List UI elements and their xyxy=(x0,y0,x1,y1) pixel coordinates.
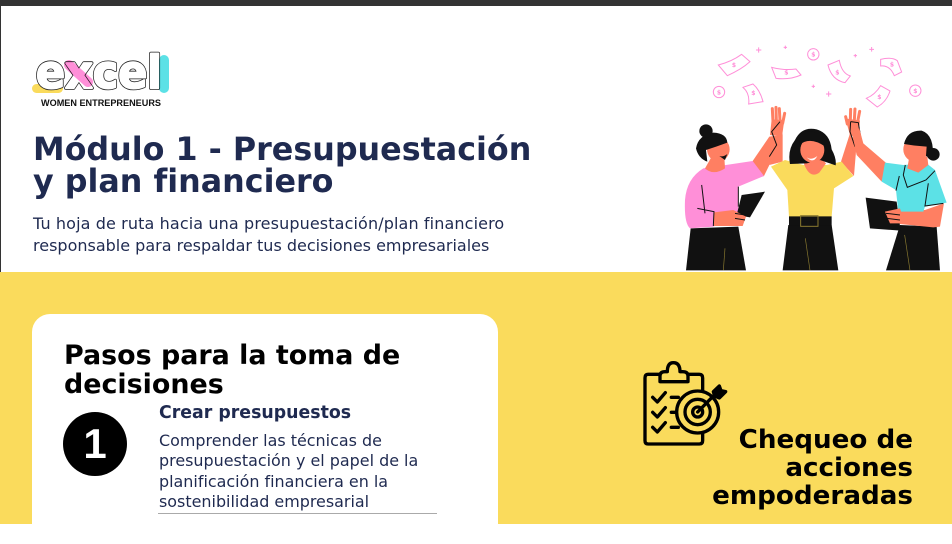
illustration: three women high-fiving xyxy=(685,107,947,270)
woman right xyxy=(852,128,947,270)
heading: steps: decisiones xyxy=(64,368,224,400)
title: y plan financiero xyxy=(33,164,333,200)
subtitle xyxy=(32,214,504,255)
heading: steps xyxy=(64,340,400,400)
logo: excel women entrepreneurs: excel xyxy=(36,46,162,99)
subtitle: responsable para respaldar tus decisiones empresariales xyxy=(33,236,489,255)
title: Módulo 1 - Presupuestación xyxy=(33,132,531,168)
yellow lower section xyxy=(0,272,952,524)
step 1 description: presupuestación y el papel de la xyxy=(159,451,418,470)
step 1 divider xyxy=(158,513,437,514)
heading: empowered actions check: empoderadas xyxy=(712,481,913,511)
illustration: floating money: $ xyxy=(890,62,894,69)
step 1 number badge: 1 xyxy=(83,420,107,467)
step 1 description: sostenibilidad empresarial xyxy=(159,492,369,511)
logo: excel women entrepreneurs: excel xyxy=(36,46,162,99)
illustration: floating money: $ xyxy=(751,90,755,97)
heading: empowered actions check xyxy=(712,425,913,511)
step 1 description: Comprender las técnicas de xyxy=(159,431,382,450)
step 1 title: Crear presupuestos xyxy=(159,403,351,423)
illustration: floating money: $ xyxy=(732,62,736,69)
illustration: floating money: $ xyxy=(913,88,917,95)
illustration: floating money: $ xyxy=(717,89,721,96)
heading: empowered actions check: acciones xyxy=(785,453,913,483)
illustration: floating money: $ xyxy=(877,94,881,101)
step 1 description: planificación financiera en la xyxy=(159,472,388,491)
top bar xyxy=(0,0,952,6)
step 1 description xyxy=(159,431,418,511)
woman middle xyxy=(769,109,861,270)
left edge line xyxy=(0,6,1,272)
woman left xyxy=(685,107,785,270)
panel: steps card xyxy=(32,314,498,544)
heading: steps: Pasos para la toma de xyxy=(64,340,400,370)
title xyxy=(33,132,531,200)
step 1 number badge xyxy=(63,412,127,476)
illustration: floating money: $ xyxy=(811,52,815,59)
illustration: floating money: $ xyxy=(784,70,788,77)
illustration: floating money: $ xyxy=(835,69,839,76)
logo: excel women entrepreneurs: WOMEN ENTREPRENEURS xyxy=(41,98,161,109)
subtitle: Tu hoja de ruta hacia una presupuestación/plan financiero xyxy=(33,214,504,233)
heading: empowered actions check: Chequeo de xyxy=(739,425,913,455)
